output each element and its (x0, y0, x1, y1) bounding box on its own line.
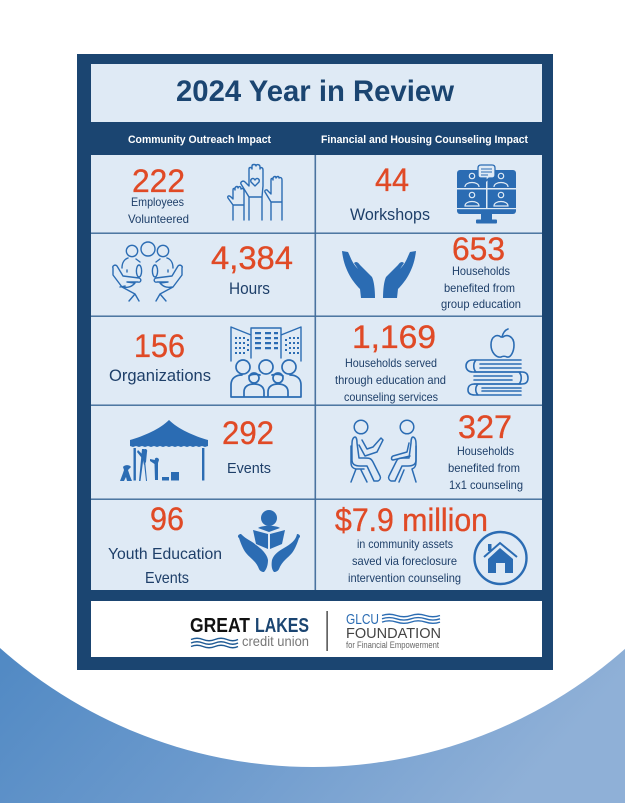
stat: 156 organizations: Organizations (109, 366, 211, 385)
stat: 327 households: 327 (458, 409, 512, 445)
stat: 653 households: Households (452, 264, 510, 278)
logo: Great Lakes Credit Union: LAKES (255, 615, 309, 637)
stat: 292 events: Events (227, 460, 271, 477)
icon: buildings and people (231, 327, 301, 397)
stats grid background (91, 155, 542, 590)
stat: 653 households: group education (441, 297, 521, 311)
icon: apple and books (466, 329, 528, 395)
icon: people in hands (113, 242, 182, 301)
logo: Great Lakes Credit Union: credit union (242, 633, 309, 649)
stat: 222 employees: Volunteered (128, 212, 189, 226)
stat: 1,169 households: Households served (345, 356, 437, 370)
stat: 96 youth education events: 96 (150, 501, 184, 537)
stat: 222 employees: 222 (132, 163, 185, 199)
icon: raised hands (228, 164, 282, 220)
stat: 327 households: Households (457, 444, 514, 458)
stat: 222 employees: Employees (131, 195, 184, 209)
stat: 327 households (448, 409, 523, 492)
logo: Great Lakes Credit Union (190, 615, 309, 649)
stat: $7.9 million: $7.9 million (335, 502, 488, 538)
stat: 4,384 hours: Hours (229, 279, 270, 298)
title panel (91, 64, 542, 122)
stat: 4,384 hours (211, 240, 293, 298)
icon: one-on-one counseling (351, 420, 416, 482)
stat: 156 organizations: 156 (134, 328, 185, 364)
logo: GLCU Foundation: FOUNDATION (346, 625, 441, 642)
stat: 44 workshops: 44 (375, 162, 409, 198)
logo: Great Lakes Credit Union: GREAT (190, 615, 250, 637)
stat: 96 youth education events: Events (145, 570, 189, 587)
stat: 96 youth education events (108, 501, 222, 587)
column heading: community: Community Outreach Impact (128, 134, 271, 146)
logo: GLCU Foundation (346, 611, 441, 650)
stat: 4,384 hours: 4,384 (211, 240, 293, 276)
icon: video conference monitor (457, 165, 516, 224)
stat: 222 employees (128, 163, 189, 226)
title: 2024 Year in Review (176, 75, 455, 108)
stat: 1,169 households: 1,169 (352, 319, 436, 355)
stat: 96 youth education events: Youth Education (108, 546, 222, 563)
stat: $7.9 million: in community assets (357, 537, 453, 551)
stat: $7.9 million: saved via foreclosure (352, 554, 457, 568)
stat: 156 organizations (109, 328, 211, 385)
stat: $7.9 million (335, 502, 488, 585)
icon: event tent (120, 420, 208, 481)
column heading: financial: Financial and Housing Counseling Impact (321, 134, 528, 146)
icon: open hands (342, 251, 416, 298)
stat: 44 workshops: Workshops (350, 205, 430, 224)
logo: GLCU Foundation: GLCU (346, 611, 379, 628)
stat: 653 households (441, 231, 521, 311)
stat: $7.9 million: intervention counseling (348, 571, 461, 585)
icon: child reading in hands (238, 510, 300, 572)
stat: 1,169 households: through education and (335, 373, 446, 387)
stat: 327 households: benefited from (448, 461, 520, 475)
navy card (77, 54, 553, 670)
stat: 44 workshops (350, 162, 430, 224)
logo band (91, 601, 542, 657)
stat: 292 events: 292 (222, 415, 274, 451)
stat: 653 households: benefited from (444, 281, 515, 295)
stat: 653 households: 653 (452, 231, 505, 267)
stat: 1,169 households (335, 319, 446, 404)
stat: 292 events (222, 415, 274, 477)
stat: 1,169 households: counseling services (344, 390, 438, 404)
stat: 327 households: 1x1 counseling (449, 478, 523, 492)
icon: house in circle (474, 532, 526, 584)
logo: GLCU Foundation: for Financial Empowerment (346, 640, 439, 650)
